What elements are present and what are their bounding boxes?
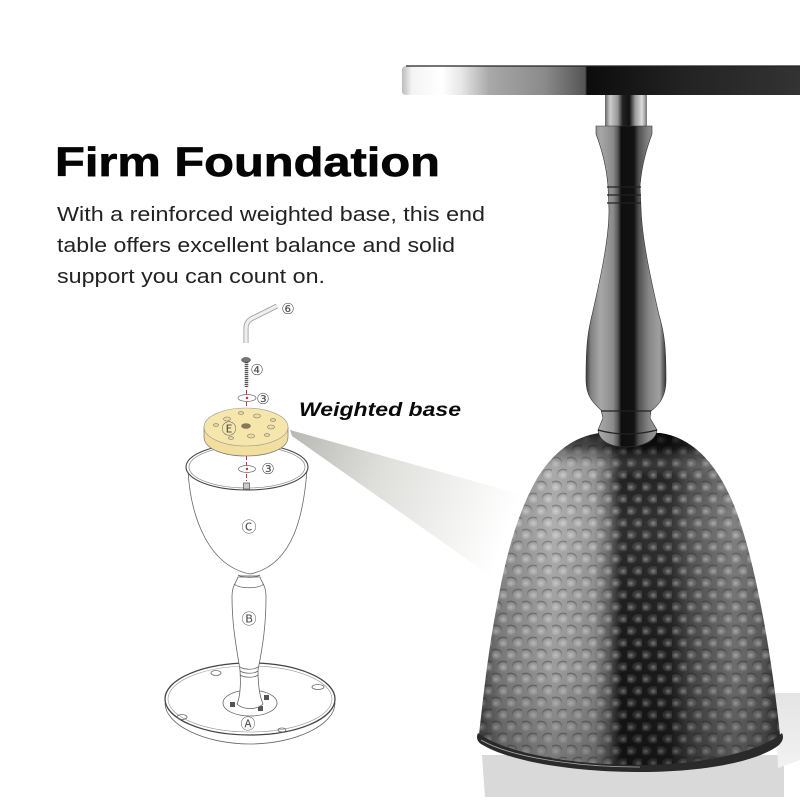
part A: round base plate: Ⓐ <box>240 715 256 733</box>
part C: bell cup: Ⓒ <box>241 518 257 536</box>
part 6: hex key <box>246 300 295 343</box>
hammered bell base <box>477 433 783 772</box>
callout label: weighted base: Weighted base <box>299 400 462 421</box>
part 3: lower washer: ③ <box>261 460 275 478</box>
pedestal rings <box>598 187 657 434</box>
body text: With a reinforced weighted base, this end <box>57 204 485 226</box>
highlight beam from weighted base <box>290 430 520 586</box>
assembly diagram <box>165 300 335 744</box>
part B: pedestal stem <box>232 577 266 708</box>
body text: table offers excellent balance and solid <box>57 235 455 257</box>
body text: support you can count on. <box>57 266 325 288</box>
floor shadow <box>482 693 800 797</box>
part A: round base plate <box>165 663 335 744</box>
part 4: screw <box>242 358 264 387</box>
part C: bell cup <box>186 444 308 577</box>
body text <box>57 204 485 288</box>
table top <box>402 66 800 95</box>
table pedestal <box>586 126 666 447</box>
part 3: upper washer: ③ <box>256 390 270 408</box>
table pedestal neck <box>605 94 647 127</box>
part E: yellow weighted disk <box>204 408 288 456</box>
part B: pedestal stem: Ⓑ <box>241 610 257 628</box>
part E: yellow weighted disk: Ⓔ <box>221 420 237 438</box>
part 3: lower washer <box>238 460 275 478</box>
part 6: hex key: ⑥ <box>281 300 295 318</box>
title: Firm Foundation <box>55 139 440 185</box>
part 3: upper washer <box>238 390 270 408</box>
part 4: screw: ④ <box>250 361 264 379</box>
red assembly axis <box>246 390 248 481</box>
product photo: end table <box>402 66 800 772</box>
